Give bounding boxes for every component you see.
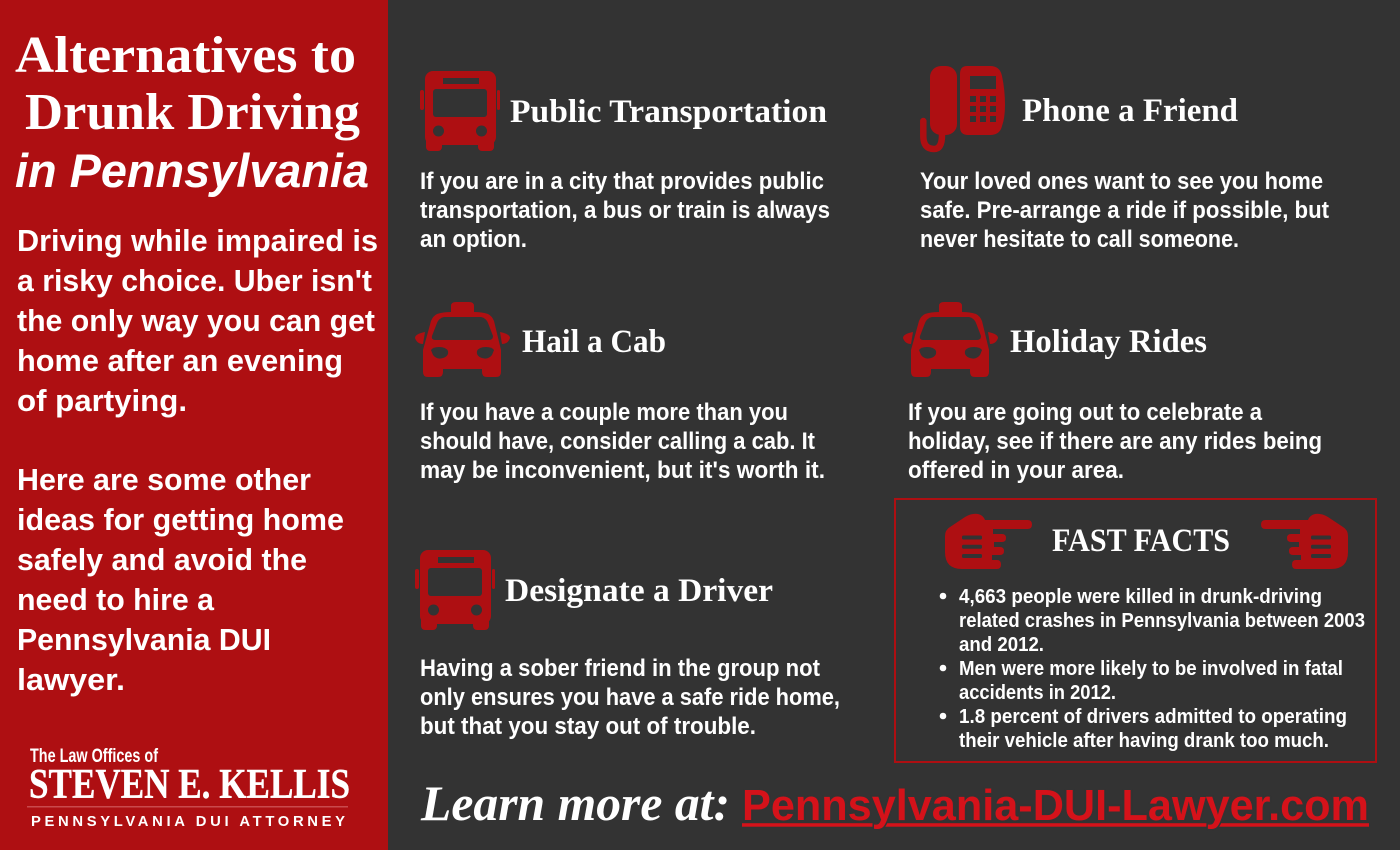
fact list (940, 585, 1365, 752)
body text: holiday, see if there are any rides being (908, 428, 1322, 455)
body text: transportation, a bus or train is always (420, 197, 830, 224)
heading: Designate a Driver (505, 573, 773, 609)
heading: Hail a Cab (522, 324, 666, 360)
heading: Public Transportation (510, 94, 827, 130)
title: in Pennsylvania (15, 144, 369, 197)
intro text: Driving while impaired is (17, 223, 378, 258)
footer call to action: Learn more at: (420, 775, 730, 831)
footer call to action (420, 775, 1369, 831)
footer call to action: Pennsylvania-DUI-Lawyer.com (742, 781, 1369, 830)
intro text: a risky choice. Uber isn't (17, 263, 372, 298)
panel: fast facts (895, 499, 1376, 762)
body text (920, 168, 1329, 253)
icon: taxi (903, 302, 998, 377)
icon: taxi (415, 302, 510, 377)
logo: law offices: PENNSYLVANIA DUI ATTORNEY (31, 814, 345, 830)
secondary text (17, 462, 344, 697)
panel: public transportation (420, 71, 830, 253)
fact list: and 2012. (959, 633, 1044, 656)
intro text: home after an evening (17, 343, 343, 378)
fact list: related crashes in Pennsylvania between 2003 (959, 609, 1365, 632)
body text (420, 399, 825, 484)
logo: law offices: The Law Offices of (30, 745, 158, 767)
intro text: of partying. (17, 383, 187, 418)
secondary text: lawyer. (17, 662, 125, 697)
body text: Having a sober friend in the group not (420, 655, 820, 682)
panel: phone a friend (920, 66, 1329, 253)
fact list: accidents in 2012. (959, 681, 1116, 704)
fact list: their vehicle after having drank too much. (959, 729, 1329, 752)
secondary text: ideas for getting home (17, 502, 344, 537)
panel: designate a driver (415, 550, 840, 740)
icon: bus (420, 71, 500, 151)
title: Drunk Driving (25, 84, 360, 141)
heading: Phone a Friend (1022, 93, 1238, 129)
body text: may be inconvenient, but it's worth it. (420, 457, 825, 484)
fact list: Men were more likely to be involved in fatal (959, 657, 1343, 680)
fact list: 1.8 percent of drivers admitted to operating (959, 705, 1347, 728)
body text: never hesitate to call someone. (920, 226, 1239, 253)
body text: only ensures you have a safe ride home, (420, 684, 840, 711)
secondary text: need to hire a (17, 582, 215, 617)
body text (420, 655, 840, 740)
panel: holiday rides (903, 302, 1322, 484)
body text: If you are in a city that provides public (420, 168, 824, 195)
panel: left sidebar (0, 0, 388, 850)
icon: bus (415, 550, 495, 630)
logo: law offices: STEVEN E. KELLIS (29, 762, 350, 808)
panel: hail a cab (415, 302, 825, 484)
fact list: 4,663 people were killed in drunk-driving (959, 585, 1322, 608)
secondary text: safely and avoid the (17, 542, 307, 577)
body text: should have, consider calling a cab. It (420, 428, 815, 455)
icon: pointing hand left (945, 514, 1032, 569)
body text: an option. (420, 226, 527, 253)
intro text (17, 223, 378, 418)
body text (908, 399, 1322, 484)
body text: but that you stay out of trouble. (420, 713, 756, 740)
body text: If you have a couple more than you (420, 399, 788, 426)
body text: offered in your area. (908, 457, 1124, 484)
intro text: the only way you can get (17, 303, 375, 338)
title: Alternatives to (15, 27, 356, 84)
logo: law offices (27, 745, 350, 830)
heading: FAST FACTS (1052, 523, 1230, 559)
body text: safe. Pre-arrange a ride if possible, but (920, 197, 1329, 224)
icon: telephone (923, 66, 1005, 149)
body text (420, 168, 830, 253)
heading: Holiday Rides (1010, 324, 1207, 360)
icon: pointing hand right (1261, 514, 1348, 569)
title (15, 27, 369, 197)
body text: If you are going out to celebrate a (908, 399, 1263, 426)
secondary text: Here are some other (17, 462, 311, 497)
secondary text: Pennsylvania DUI (17, 622, 271, 657)
body text: Your loved ones want to see you home (920, 168, 1323, 195)
